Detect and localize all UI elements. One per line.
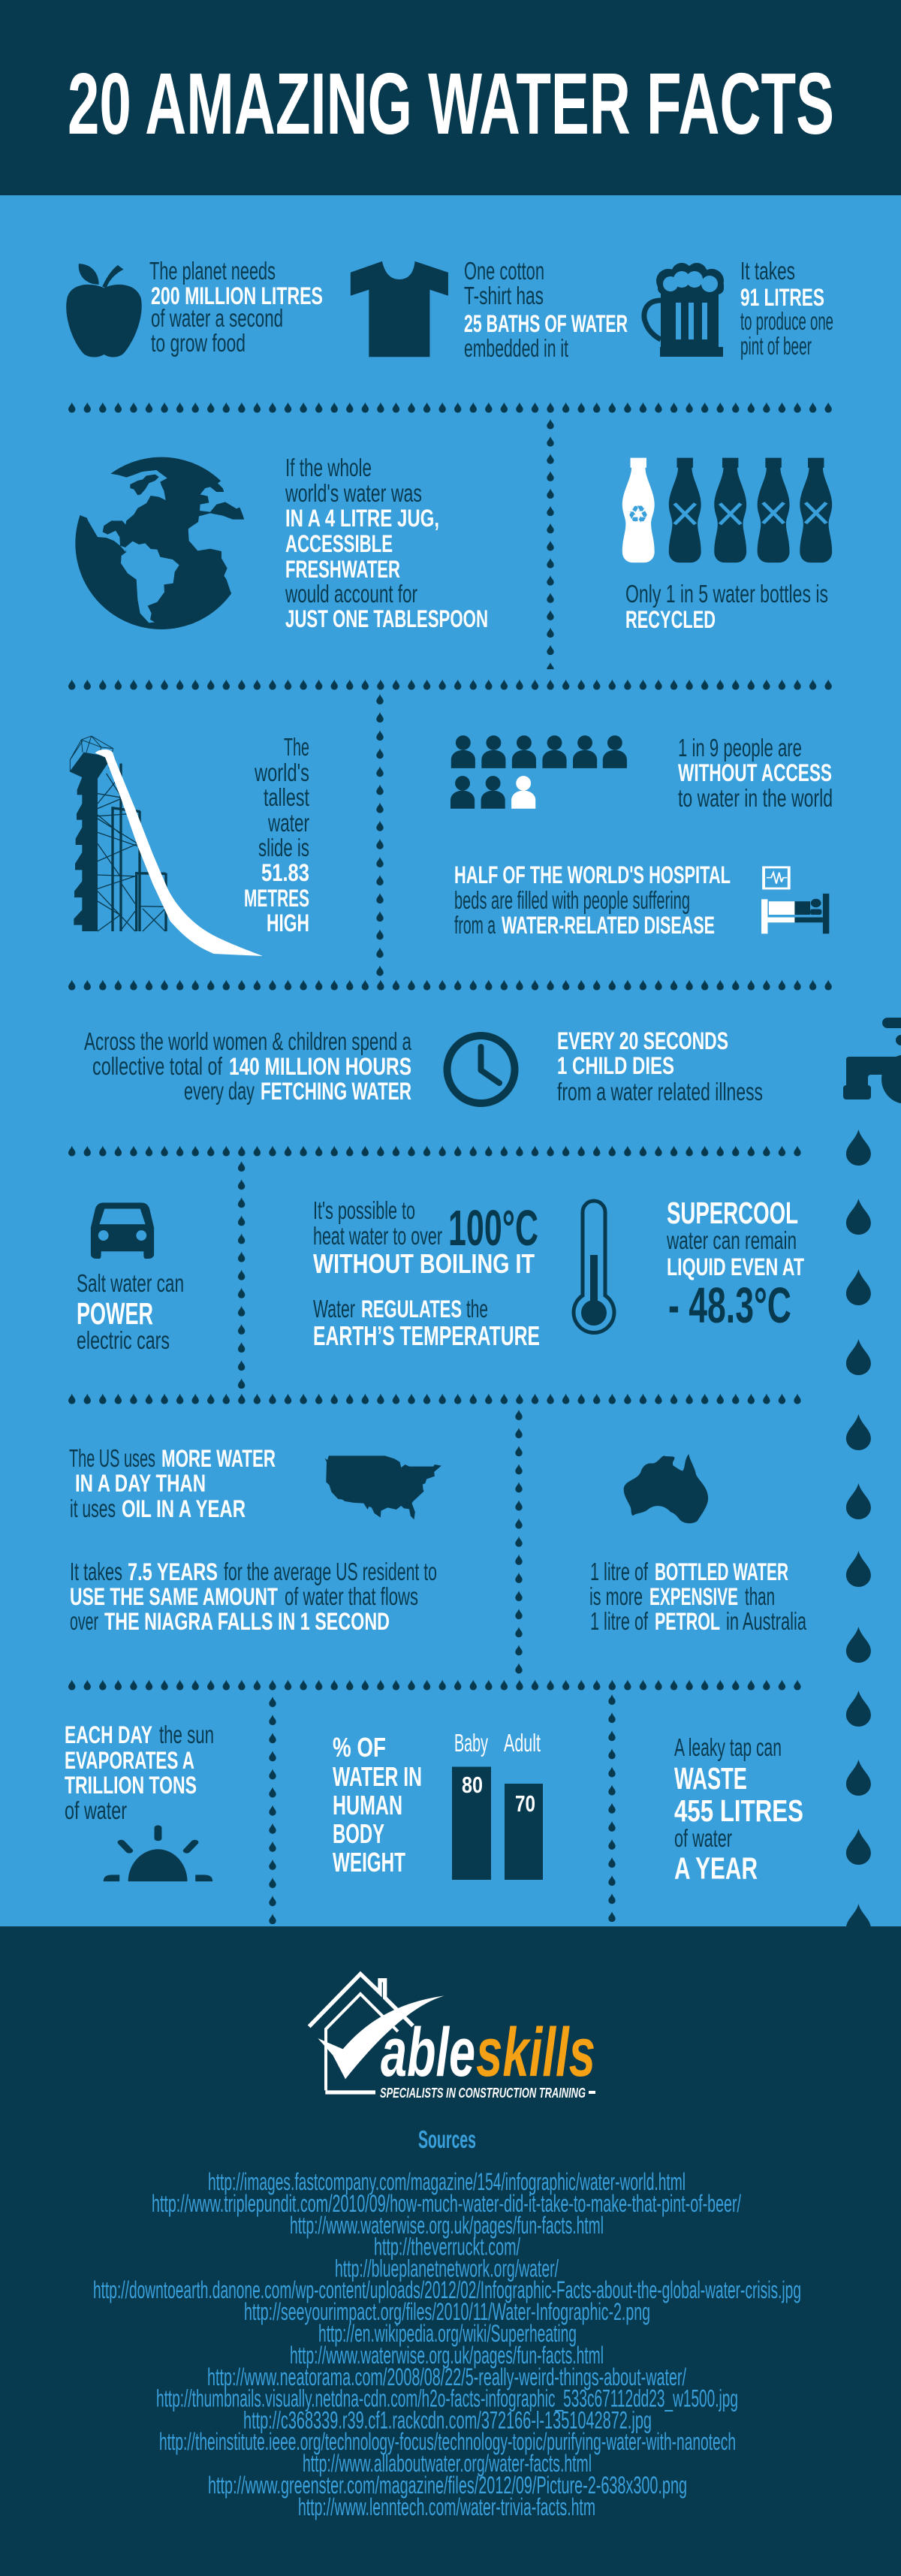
- text: percent of water: BODY: [333, 1818, 384, 1849]
- sources list: http://www.allaboutwater.org/water-facts.html: [303, 2450, 592, 2477]
- divider column 4: [515, 1410, 523, 1674]
- icon: nine people: [450, 735, 627, 809]
- text: Niagara: for the average US resident to: [224, 1558, 437, 1585]
- icon: thermometer: [574, 1201, 614, 1332]
- icon: clock: [447, 1036, 515, 1103]
- divider column 6: [608, 1694, 616, 1922]
- icon: hospital bed and monitor: [761, 867, 829, 934]
- text: beer: pint of beer: [740, 332, 812, 360]
- divider column 2: [376, 694, 384, 976]
- text: cotton t-shirt: One cotton: [464, 257, 544, 285]
- text: tallest water slide: world's: [254, 759, 309, 786]
- text: leaky tap: A leaky tap can: [674, 1733, 782, 1761]
- text: 100 degrees without boiling: [313, 1196, 538, 1279]
- text: bottled water vs petrol: is more: [589, 1582, 643, 1610]
- text: 100 degrees without boiling: It's possible to: [313, 1196, 415, 1224]
- text: 100 degrees without boiling: heat water to over: [313, 1222, 442, 1250]
- divider column 3: [238, 1161, 246, 1389]
- icon: tap: [843, 1018, 901, 1104]
- text: hospital beds: HALF OF THE WORLD'S HOSPITAL: [454, 861, 731, 888]
- text: hospital beds: [454, 861, 731, 939]
- bar chart: baby vs adult: 80: [462, 1772, 483, 1798]
- text: leaky tap: A YEAR: [674, 1851, 758, 1885]
- text: 1 in 9 people: 1 in 9 people are: [678, 734, 802, 762]
- text: percent of water: HUMAN: [333, 1790, 402, 1820]
- text: whole world's water: world's water was: [285, 479, 422, 507]
- text: hospital beds: beds are filled with people suffering: [454, 886, 690, 914]
- text: Niagara: over: [70, 1607, 98, 1635]
- text: 100 degrees without boiling: 100°C: [448, 1200, 538, 1256]
- text: Niagara: 7.5 YEARS: [128, 1558, 218, 1585]
- sources list: http://en.wikipedia.org/wiki/Superheating: [318, 2320, 577, 2347]
- text: every 20 seconds: EVERY 20 SECONDS: [557, 1027, 728, 1054]
- text: whole world's water: JUST ONE TABLESPOON: [285, 605, 488, 632]
- text: planet needs: 200 MILLION LITRES: [151, 282, 323, 309]
- divider row 4: [68, 1145, 801, 1157]
- text: salt water: POWER: [77, 1296, 153, 1331]
- text: leaky tap: WASTE: [674, 1761, 747, 1796]
- text: percent of water: WATER IN: [333, 1761, 422, 1792]
- text: hospital beds: WATER-RELATED DISEASE: [502, 912, 715, 939]
- footer band: [0, 1926, 901, 2576]
- text: whole world's water: would account for: [285, 580, 417, 608]
- sources heading: Sources: [418, 2125, 476, 2153]
- text: salt water: [77, 1269, 184, 1354]
- text: planet needs: to grow food: [151, 329, 246, 357]
- text: Niagara: [70, 1558, 437, 1635]
- text: beer: It takes: [740, 257, 795, 285]
- sources list: http://www.waterwise.org.uk/pages/fun-facts.html: [290, 2342, 604, 2369]
- text: bottled water vs petrol: BOTTLED WATER: [655, 1558, 788, 1585]
- text: supercool: SUPERCOOL: [667, 1196, 798, 1230]
- text: fetching water: FETCHING WATER: [261, 1078, 411, 1105]
- text: regulates temperature: REGULATES: [361, 1296, 462, 1323]
- text: US water vs oil: OIL IN A YEAR: [122, 1495, 246, 1522]
- text: bottled water vs petrol: than: [745, 1582, 775, 1610]
- text: regulates temperature: [313, 1295, 540, 1351]
- icon: t-shirt: [351, 261, 448, 357]
- sources list: http://seeyourimpact.org/files/2010/11/Water-Infographic-2.png: [244, 2298, 650, 2325]
- icon: water slide tower: [70, 736, 263, 956]
- text: beer: to produce one: [740, 307, 833, 335]
- icon: apple: [66, 264, 142, 357]
- text: bottled water vs petrol: 1 litre of: [590, 1607, 649, 1635]
- logo: ableskills: [309, 1974, 595, 2101]
- text: tallest water slide: slide is: [258, 834, 309, 861]
- icon: sun: [104, 1828, 212, 1881]
- text: US water vs oil: [69, 1444, 276, 1522]
- text: Niagara: THE NIAGRA FALLS IN 1 SECOND: [104, 1608, 390, 1635]
- bar chart: baby vs adult: Adult: [504, 1729, 541, 1757]
- text: percent of water: [333, 1732, 422, 1878]
- text: supercool: [666, 1196, 804, 1334]
- text: whole world's water: [285, 454, 488, 632]
- text: bottles recycled: RECYCLED: [625, 606, 716, 633]
- divider row 2: [68, 679, 832, 690]
- text: bottled water vs petrol: in Australia: [726, 1607, 806, 1635]
- icon: earth globe: [70, 457, 276, 629]
- text: supercool: water can remain: [666, 1226, 797, 1254]
- text: Niagara: of water that flows: [285, 1582, 418, 1610]
- text: every 20 seconds: 1 CHILD DIES: [557, 1052, 674, 1079]
- icon: USA map: [324, 1455, 441, 1519]
- logo: ableskills: SPECIALISTS IN CONSTRUCTION TRAINING: [380, 2086, 586, 2101]
- sources list: http://www.lenntech.com/water-trivia-facts.htm: [298, 2493, 595, 2520]
- text: tallest water slide: HIGH: [267, 909, 309, 937]
- text: planet needs: The planet needs: [149, 257, 276, 285]
- big falling drops: [846, 1130, 871, 1940]
- text: planet needs: of water a second: [151, 304, 283, 332]
- text: regulates temperature: EARTH’S TEMPERATURE: [313, 1320, 540, 1351]
- text: supercool: - 48.3°C: [668, 1277, 791, 1334]
- text: Niagara: USE THE SAME AMOUNT: [70, 1583, 278, 1610]
- text: percent of water: % OF: [333, 1732, 386, 1763]
- text: tallest water slide: 51.83: [261, 859, 309, 886]
- icon: Australia map: [624, 1454, 708, 1523]
- text: supercool: LIQUID EVEN AT: [667, 1253, 804, 1280]
- text: whole world's water: FRESHWATER: [285, 556, 400, 583]
- text: salt water: Salt water can: [77, 1269, 184, 1297]
- bar chart: baby vs adult: [452, 1729, 543, 1880]
- text: cotton t-shirt: [464, 257, 628, 362]
- text: sun evaporates: EACH DAY: [65, 1721, 152, 1748]
- text: planet needs: [149, 257, 323, 357]
- text: bottles recycled: [625, 580, 828, 633]
- text: bottled water vs petrol: PETROL: [655, 1608, 720, 1635]
- text: bottled water vs petrol: 1 litre of: [590, 1558, 649, 1585]
- logo: ableskills: skills: [476, 2014, 595, 2091]
- sources list: [93, 2168, 801, 2520]
- text: beer: 91 LITRES: [740, 284, 824, 311]
- text: tallest water slide: tallest: [264, 783, 309, 811]
- text: Niagara: It takes: [70, 1558, 122, 1585]
- icon: recycle symbol: ♻: [628, 500, 649, 529]
- bar chart: baby vs adult: 70: [515, 1790, 535, 1817]
- text: every 20 seconds: [557, 1027, 763, 1106]
- text: sun evaporates: [65, 1721, 214, 1824]
- divider column 1: [547, 419, 554, 669]
- text: bottled water vs petrol: [589, 1558, 806, 1635]
- text: hospital beds: from a: [454, 911, 496, 939]
- text: US water vs oil: IN A DAY THAN: [75, 1470, 206, 1497]
- text: fetching water: every day: [184, 1077, 255, 1105]
- text: fetching water: Across the world women & children spend a: [84, 1027, 411, 1055]
- text: leaky tap: 455 LITRES: [674, 1793, 803, 1828]
- sources list: http://blueplanetnetwork.org/water/: [335, 2255, 559, 2282]
- text: sun evaporates: TRILLION TONS: [65, 1772, 197, 1799]
- divider row 5: [68, 1393, 801, 1404]
- text: percent of water: WEIGHT: [333, 1847, 405, 1878]
- text: 100 degrees without boiling: WITHOUT BOILING IT: [313, 1248, 535, 1279]
- text: whole world's water: ACCESSIBLE: [285, 530, 393, 557]
- text: leaky tap: [674, 1733, 803, 1885]
- text: leaky tap: of water: [674, 1824, 732, 1852]
- text: whole world's water: If the whole: [285, 454, 372, 481]
- sources list: http://www.waterwise.org.uk/pages/fun-facts.html: [290, 2212, 604, 2239]
- text: cotton t-shirt: embedded in it: [464, 334, 568, 362]
- divider row 1: [68, 402, 832, 413]
- text: whole world's water: IN A 4 LITRE JUG,: [285, 505, 439, 532]
- text: bottled water vs petrol: EXPENSIVE: [649, 1583, 738, 1610]
- text: US water vs oil: MORE WATER: [161, 1445, 276, 1472]
- text: sun evaporates: EVAPORATES A: [65, 1747, 194, 1774]
- icon: car: [91, 1202, 154, 1259]
- text: sun evaporates: the sun: [159, 1721, 214, 1748]
- text: beer: [740, 257, 833, 360]
- text: 1 in 9 people: [678, 734, 833, 812]
- text: fetching water: [84, 1027, 411, 1105]
- icon: five bottles: [622, 458, 832, 563]
- text: fetching water: 140 MILLION HOURS: [229, 1053, 411, 1080]
- text: every 20 seconds: from a water related illness: [557, 1078, 763, 1106]
- sources list: http://theverruckt.com/: [374, 2234, 520, 2261]
- text: regulates temperature: the: [466, 1295, 488, 1323]
- text: tallest water slide: water: [267, 809, 309, 837]
- text: tallest water slide: The: [284, 733, 309, 761]
- text: fetching water: collective total of: [92, 1052, 223, 1080]
- bar chart: baby vs adult: Baby: [454, 1729, 488, 1757]
- text: US water vs oil: it uses: [70, 1495, 116, 1522]
- divider row 6: [68, 1679, 801, 1691]
- text: 1 in 9 people: to water in the world: [678, 784, 833, 812]
- sources list: http://c368339.r39.cf1.rackcdn.com/372166-l-1351042872.jpg: [243, 2406, 652, 2433]
- text: regulates temperature: Water: [313, 1295, 355, 1323]
- text: cotton t-shirt: T-shirt has: [464, 282, 544, 309]
- divider column 5: [269, 1697, 276, 1924]
- text: cotton t-shirt: 25 BATHS OF WATER: [464, 310, 628, 337]
- text: tallest water slide: METRES: [244, 885, 309, 912]
- text: tallest water slide: [244, 733, 309, 937]
- header band: [0, 0, 901, 195]
- text: 1 in 9 people: WITHOUT ACCESS: [678, 759, 832, 786]
- background: blue body: [0, 195, 901, 1926]
- logo: ableskills: able: [381, 2014, 475, 2091]
- icon: beer mug: [644, 263, 724, 357]
- text: salt water: electric cars: [77, 1326, 170, 1354]
- text: sun evaporates: of water: [65, 1796, 127, 1824]
- divider row 3: [68, 979, 832, 991]
- text: US water vs oil: The US uses: [69, 1444, 155, 1472]
